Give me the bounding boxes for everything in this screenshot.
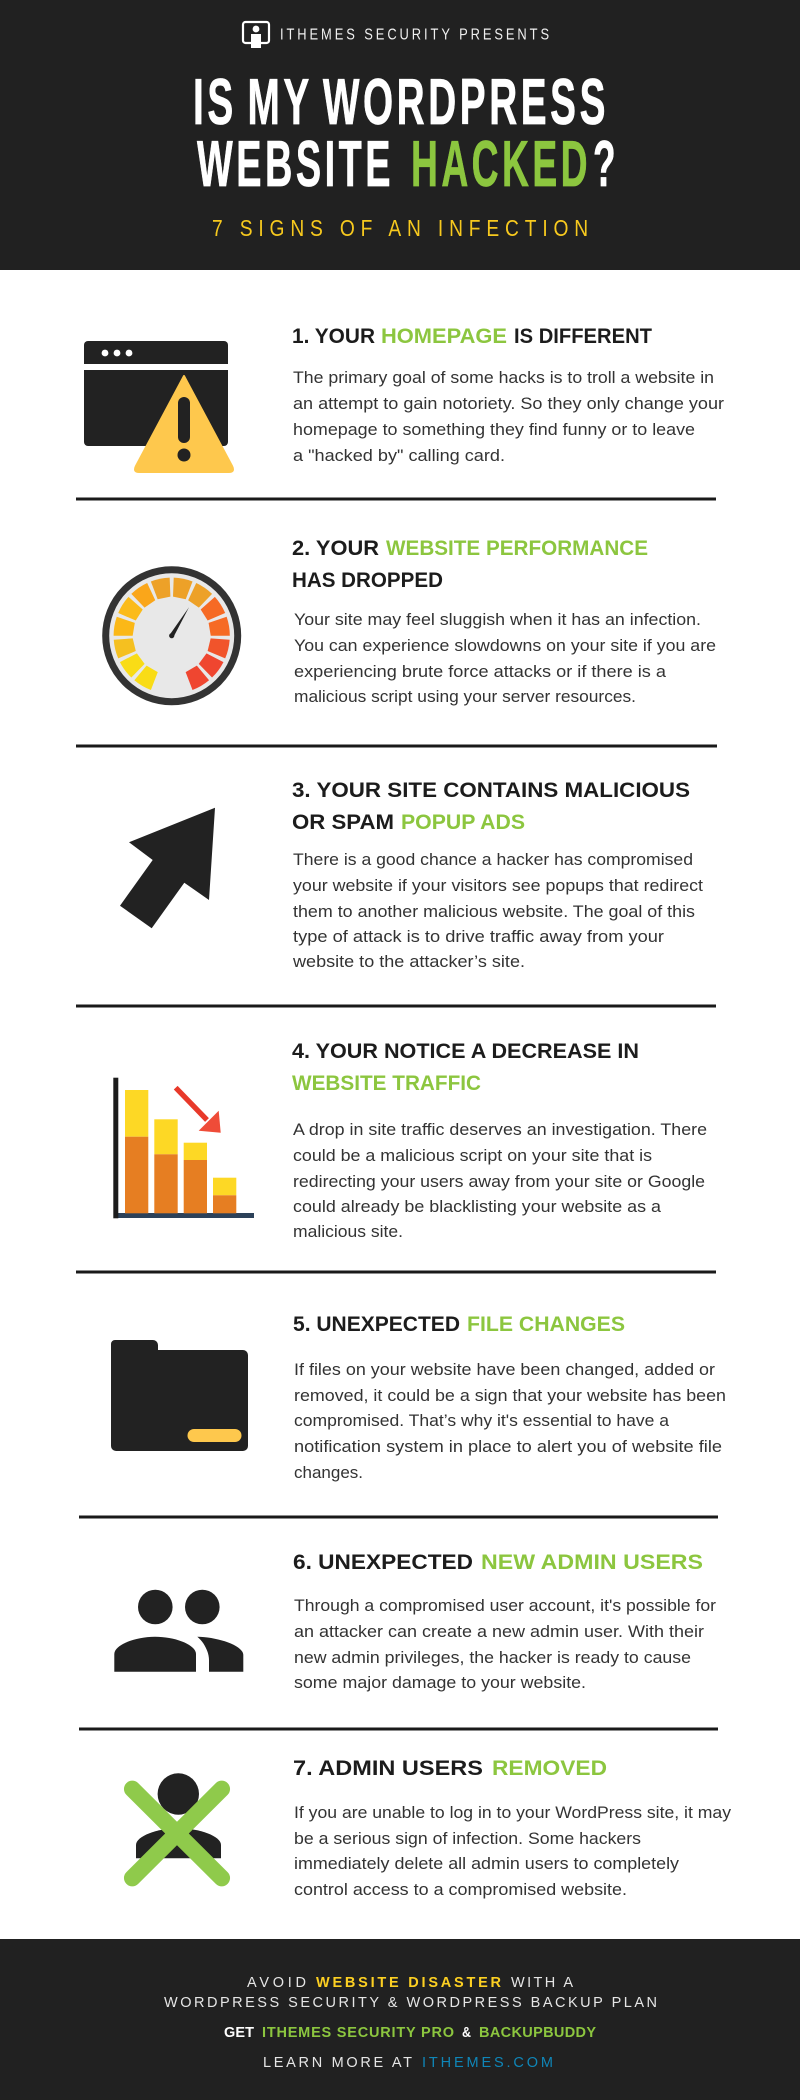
body text: control access to a compromised website. (294, 1881, 627, 1899)
icon: speed gauge (106, 570, 238, 702)
heading: HAS DROPPED (292, 569, 443, 592)
icon: crossed-out user (132, 1773, 222, 1878)
body text (294, 1361, 726, 1482)
footer line: avoid website disaster: WITH A (511, 1975, 573, 1991)
heading: 1. YOUR (292, 325, 375, 348)
body text: immediately delete all admin users to completely (294, 1855, 680, 1873)
body text: removed, it could be a sign that your website has been (294, 1387, 726, 1405)
body text: There is a good chance a hacker has compromised (293, 851, 693, 869)
body text: type of attack is to drive traffic away from your (293, 928, 665, 946)
body text: If you are unable to log in to your WordPress site, it may (294, 1804, 732, 1822)
heading: NEW ADMIN USERS (481, 1551, 703, 1574)
footer line: product call to action: ITHEMES SECURITY PRO (262, 2025, 454, 2041)
panel: sign 5 file changes (111, 1313, 726, 1482)
body text (294, 1804, 732, 1899)
heading: WEBSITE PERFORMANCE (386, 537, 648, 560)
body text: an attacker can create a new admin user. With their (294, 1623, 705, 1641)
footer line: avoid website disaster: AVOID (247, 1975, 306, 1991)
panel: sign 7 admin users removed (132, 1757, 732, 1899)
heading (293, 1551, 703, 1574)
title (193, 65, 619, 200)
heading: HOMEPAGE (381, 325, 507, 348)
title: HACKED (411, 127, 591, 200)
subtitle: 7 SIGNS OF AN INFECTION (212, 215, 594, 241)
heading: 5. UNEXPECTED (293, 1313, 460, 1336)
chart: falling bars (113, 1078, 254, 1218)
body text: could be a malicious script on your site that is (293, 1147, 652, 1165)
body text: some major damage to your website. (294, 1674, 586, 1692)
body text (294, 1597, 717, 1692)
body text: redirecting your users away from your site or Google (293, 1173, 705, 1191)
heading: OR SPAM (292, 811, 394, 834)
footer line: learn more: ITHEMES.COM (422, 2055, 553, 2071)
footer line: product call to action: & (462, 2025, 471, 2041)
panel: sign 3 popup ads (120, 779, 703, 971)
body text: be a serious sign of infection. Some hackers (294, 1830, 641, 1848)
body text (293, 1121, 707, 1241)
arrow: downward trend (176, 1088, 221, 1133)
body text: experiencing brute force attacks or if there is a (294, 663, 667, 681)
footer line: product call to action: GET (224, 2025, 254, 2041)
title: ? (593, 127, 619, 200)
panel: footer (0, 1939, 800, 2100)
panel: header (0, 0, 800, 270)
body text: homepage to something they find funny or to leave (293, 421, 695, 439)
heading: 3. YOUR SITE CONTAINS MALICIOUS (292, 779, 690, 802)
panel: sign 1 homepage (84, 325, 725, 472)
footer line: product call to action: BACKUPBUDDY (479, 2025, 596, 2041)
panel: sign 2 performance (106, 537, 716, 706)
footer line: security and backup plan: WORDPRESS SECURITY & WORDPRESS BACKUP PLAN (164, 1995, 657, 2011)
footer line: learn more: LEARN MORE AT (263, 2055, 412, 2071)
body text: could already be blacklisting your website as a (293, 1198, 662, 1216)
footer line: product call to action (224, 2025, 596, 2041)
heading: 7. ADMIN USERS (293, 1757, 483, 1780)
body text (293, 369, 725, 465)
body text: them to another malicious website. The goal of this (293, 903, 695, 921)
panel: sign 6 new admin users (114, 1551, 717, 1692)
heading: IS DIFFERENT (514, 325, 652, 348)
heading (292, 1040, 639, 1095)
body text: a "hacked by" calling card. (293, 447, 505, 465)
heading (293, 1757, 607, 1780)
body text: malicious script using your server resources. (294, 688, 636, 706)
body text: If files on your website have been changed, added or (294, 1361, 716, 1379)
body text: malicious site. (293, 1223, 403, 1241)
body text: new admin privileges, the hacker is ready to cause (294, 1649, 691, 1667)
presenter line: ITHEMES SECURITY PRESENTS (280, 26, 552, 44)
body text (292, 851, 703, 971)
body text: website to the attacker’s site. (292, 953, 525, 971)
icon: cursor arrow (120, 808, 215, 928)
icon: ithemes logo (243, 22, 269, 48)
heading: WEBSITE TRAFFIC (292, 1072, 481, 1095)
body text (294, 611, 716, 706)
body text: an attempt to gain notoriety. So they only change your (293, 395, 725, 413)
icon: browser warning (84, 341, 233, 472)
heading (292, 325, 652, 348)
panel: sign 4 traffic (113, 1040, 707, 1241)
heading (293, 1313, 625, 1336)
icon: folder (111, 1340, 248, 1451)
heading: 2. YOUR (292, 537, 379, 560)
body text: your website if your visitors see popups that redirect (293, 877, 703, 895)
footer line: avoid website disaster (247, 1975, 573, 1991)
heading: 4. YOUR NOTICE A DECREASE IN (292, 1040, 639, 1063)
heading: REMOVED (492, 1757, 607, 1780)
body text: compromised. That’s why it's essential to have a (294, 1412, 670, 1430)
body text: Through a compromised user account, it's possible for (294, 1597, 717, 1615)
body text: changes. (294, 1464, 363, 1482)
heading (292, 537, 648, 592)
icon: two users (114, 1590, 243, 1672)
heading: POPUP ADS (401, 811, 525, 834)
heading: 6. UNEXPECTED (293, 1551, 473, 1574)
footer line: avoid website disaster: WEBSITE DISASTER (316, 1975, 502, 1991)
body text: The primary goal of some hacks is to troll a website in (293, 369, 714, 387)
body text: A drop in site traffic deserves an investigation. There (293, 1121, 707, 1139)
body text: Your site may feel sluggish when it has an infection. (294, 611, 701, 629)
title: WEBSITE (197, 127, 394, 200)
heading (292, 779, 690, 834)
heading: FILE CHANGES (467, 1313, 625, 1336)
footer line: learn more (263, 2055, 553, 2071)
body text: notification system in place to alert you of website file (294, 1438, 722, 1456)
body text: You can experience slowdowns on your site if you are (294, 637, 716, 655)
